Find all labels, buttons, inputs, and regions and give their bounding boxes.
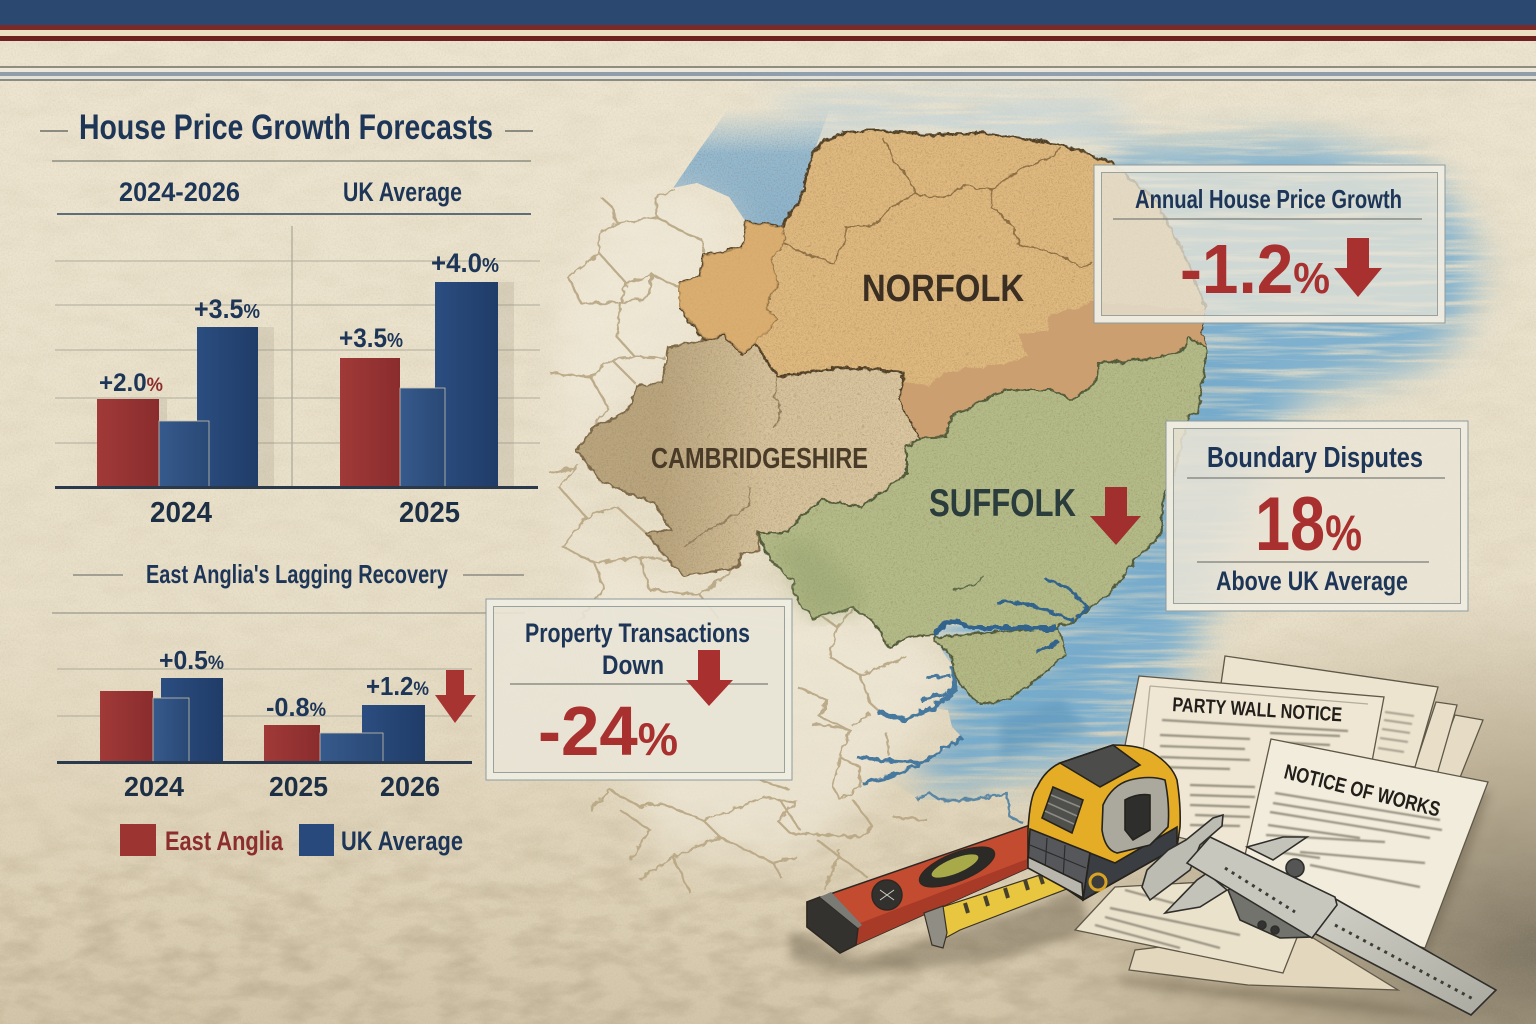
callout: annual house price growth: -1.2%	[1180, 230, 1330, 308]
heading: House Price Growth Forecasts: House Price Growth Forecasts	[79, 108, 493, 147]
bars 2024	[100, 678, 223, 762]
year labels: 2025	[399, 497, 460, 529]
value labels: +0.5%	[159, 645, 224, 675]
subheading row: period and UK average	[57, 177, 531, 214]
icon: down arrow	[1334, 238, 1382, 297]
value labels: +2.0%	[99, 369, 163, 397]
county: Suffolk	[758, 337, 1206, 703]
map label: Cambridgeshire: CAMBRIDGESHIRE	[651, 443, 868, 475]
document: party wall notice: PARTY WALL NOTICE	[1172, 694, 1343, 726]
icon: Suffolk down arrow	[1090, 487, 1141, 545]
callout: property transactions down: -24%	[538, 692, 678, 770]
value labels: +3.5%	[339, 323, 403, 353]
value labels	[99, 248, 499, 397]
callout: boundary disputes: Above UK Average	[1216, 566, 1408, 596]
year labels	[124, 771, 440, 802]
illustration: tape measure	[1028, 745, 1180, 900]
year labels: 2025	[269, 771, 328, 802]
icon: down arrow	[435, 670, 476, 723]
year labels: 2026	[380, 771, 440, 802]
callout: annual house price growth	[1094, 165, 1445, 323]
2024 bars	[97, 327, 258, 487]
callout: property transactions down: Property Transactions	[525, 618, 750, 648]
top header band	[0, 0, 1536, 81]
year labels	[150, 497, 460, 529]
value labels: -0.8%	[266, 692, 326, 722]
value labels: +4.0%	[431, 248, 499, 278]
value labels	[159, 645, 429, 722]
heading: East Anglia's Lagging Recovery: East Anglia's Lagging Recovery	[146, 559, 448, 589]
map: sea wash	[673, 95, 1480, 790]
illustration: shadows under tools	[790, 790, 1490, 1020]
document: notice of works: NOTICE OF WORKS	[1282, 761, 1443, 822]
document: notice of works	[1235, 739, 1488, 948]
icon: down arrow	[686, 650, 733, 706]
callout: annual house price growth: Annual House Price Growth	[1135, 184, 1402, 214]
illustration: stack of papers	[1075, 656, 1488, 990]
callout: property transactions down	[486, 599, 792, 780]
legend: East Anglia	[165, 826, 284, 856]
callout: boundary disputes	[1166, 421, 1468, 611]
illustration: tape blade	[924, 872, 1072, 948]
2025 bars	[340, 282, 498, 487]
bar chart: lagging recovery 2024 to 2026	[57, 645, 476, 802]
county: Cambridgeshire	[577, 335, 920, 577]
bar chart: house price growth 2024 and 2025	[55, 226, 540, 529]
subheading row: period and UK average: 2024-2026	[119, 177, 240, 207]
value labels: +3.5%	[194, 294, 260, 324]
legend: UK Average	[341, 826, 463, 856]
map label: Suffolk: SUFFOLK	[929, 482, 1076, 525]
illustration: spirit level	[807, 825, 1030, 953]
document: party wall notice	[1110, 676, 1384, 880]
map: estuaries and southern coast	[857, 667, 1023, 823]
legend	[120, 824, 463, 856]
bar shadows	[159, 282, 514, 487]
year labels: 2024	[124, 771, 184, 802]
callout: boundary disputes: 18%	[1255, 482, 1362, 567]
county: Norfolk	[679, 130, 1206, 438]
subheading row: period and UK average: UK Average	[343, 177, 462, 207]
illustration: caliper	[1142, 815, 1496, 1015]
bars 2025 and 2026	[264, 705, 425, 762]
callout: property transactions down: Down	[602, 650, 664, 680]
value labels: +1.2%	[366, 671, 429, 701]
map: cracked western land	[550, 190, 950, 893]
year labels: 2024	[150, 497, 212, 529]
map label: Norfolk: NORFOLK	[862, 268, 1024, 310]
callout: boundary disputes: Boundary Disputes	[1207, 442, 1423, 474]
